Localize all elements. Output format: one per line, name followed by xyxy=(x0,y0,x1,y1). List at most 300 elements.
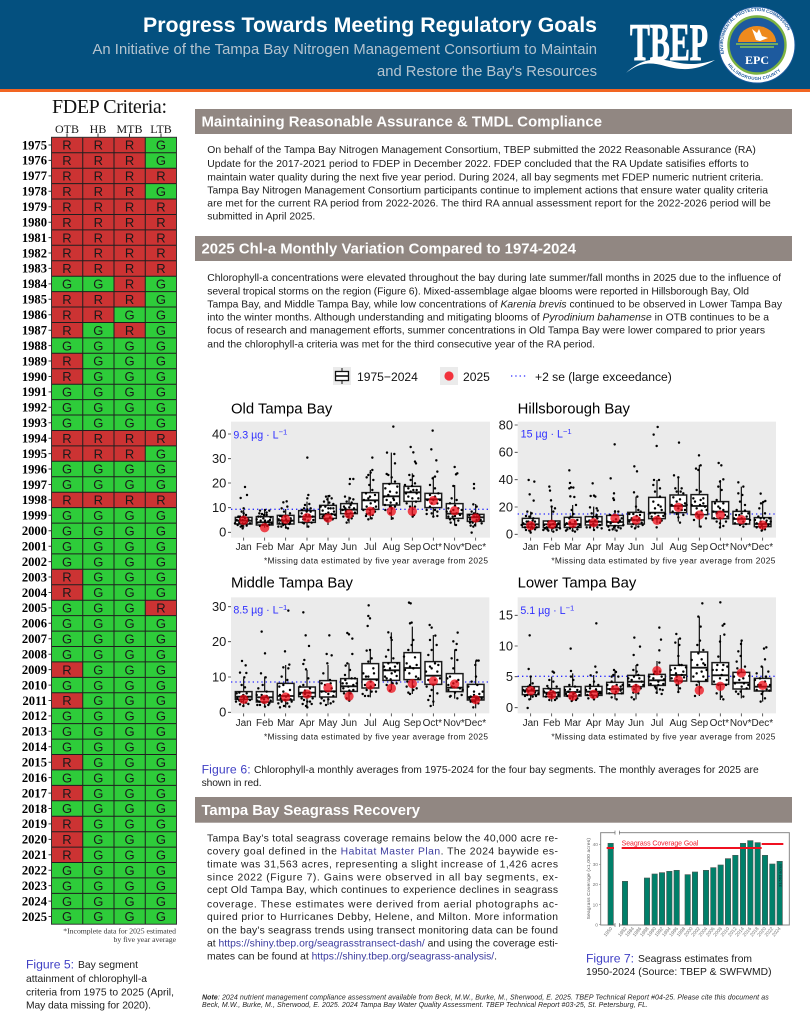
x axis labels: 2024 xyxy=(771,926,783,938)
month labels: May xyxy=(606,542,624,553)
month labels: Jul xyxy=(651,542,663,553)
x axis labels: 2000 xyxy=(683,926,695,938)
year labels: 1996 xyxy=(22,462,47,476)
x axis labels: 2008 xyxy=(712,926,724,938)
year labels: 2016 xyxy=(22,771,47,785)
heatmap cell letters: RGGG xyxy=(62,832,166,847)
month labels: Sep xyxy=(403,542,422,553)
heatmap cell letters: GGGG xyxy=(62,801,166,816)
y axis labels: 0 xyxy=(219,705,226,720)
month labels: Mar xyxy=(564,542,582,553)
heatmap cell letters xyxy=(62,138,166,924)
heatmap cell letters: GGGG xyxy=(62,863,166,878)
heatmap cell letters: RRRG xyxy=(62,184,166,199)
heatmap cell letters: RRRR xyxy=(62,431,166,446)
column labels xyxy=(55,122,172,136)
text block: Seagrass paragraph: cept Old Tampa Bay, which continues to experience declines in seagrass xyxy=(207,885,558,896)
panel: FDEP criteria heatmap xyxy=(22,96,177,1012)
y axis labels: 30 xyxy=(212,599,226,614)
x axis labels: 2022 xyxy=(764,926,775,938)
logo: EPC seal: ENVIRONMENTAL PROTECTION COMMISSION xyxy=(720,8,790,54)
logo: TBEP: TBEP xyxy=(630,14,708,72)
threshold label: 8.5 µg · L xyxy=(233,605,279,617)
year labels: 2011 xyxy=(22,694,47,708)
y axis labels: 0 xyxy=(219,525,226,540)
year labels: 1987 xyxy=(22,324,47,338)
text block: Reasonable Assurance paragraph: are met for the current RA period from 2022-2026. The third RA annual assessment report for the 2022-2026 period will be xyxy=(207,198,771,209)
chart legend: 1975−2024 xyxy=(357,370,418,384)
text block: Seagrass paragraph: coverage. These estimates were derived from aerial photographs ac- xyxy=(207,899,558,910)
2025 monthly means xyxy=(239,496,480,532)
x axis labels: 1984 xyxy=(624,926,636,938)
caption: Figure 5: attainment of chlorophyll-a xyxy=(26,974,147,985)
logo: TBEP xyxy=(626,14,715,73)
y axis labels: 20 xyxy=(212,634,226,649)
year labels: 2000 xyxy=(22,524,47,538)
heatmap cell letters: RRRR xyxy=(62,230,166,245)
heatmap cell letters: RRRR xyxy=(62,493,166,508)
chart: Hillsborough Bay xyxy=(499,401,776,566)
text block: Reasonable Assurance paragraph: maintain water quality during the next five year period. During 2024, all bay segments met FDEP numeric nutrient criteria. xyxy=(207,172,764,183)
month labels: Mar xyxy=(564,718,582,729)
month labels: Apr xyxy=(586,718,602,729)
heatmap cell letters: GGGG xyxy=(62,878,166,893)
y axis labels: 20 xyxy=(212,475,226,490)
text block: Chl-a paragraph: several tropical storms on the region (Figure 6). Mixed-assemblage algae blooms were reported in Hillsborough Bay, Old xyxy=(207,286,749,297)
y axis labels: 20 xyxy=(499,499,513,514)
year labels: 1983 xyxy=(22,262,47,276)
text block: Seagrass paragraph: covery goal defined in the Habitat Master Plan. The 2024 baywide es- xyxy=(207,846,558,857)
chart: Middle Tampa Bay xyxy=(212,576,489,741)
heatmap cell letters: GGGG xyxy=(62,709,166,724)
year labels: 1978 xyxy=(22,185,47,199)
caption: Figure 7: Seagrass estimates from xyxy=(638,954,752,965)
year labels: 2015 xyxy=(22,756,47,770)
month labels: Aug xyxy=(382,718,400,729)
header banner xyxy=(0,0,810,92)
heatmap cell letters: RRRR xyxy=(62,215,166,230)
heatmap footnote: by five year average xyxy=(113,935,177,944)
text block: Seagrass paragraph: mates can be found at https://shiny.tbep.org/seagrass-analysis/. xyxy=(207,951,497,962)
year labels: 2013 xyxy=(22,725,47,739)
year labels: 1992 xyxy=(22,401,47,415)
threshold label: 9.3 µg · L xyxy=(233,429,279,441)
heatmap cell letters: GGGG xyxy=(62,616,166,631)
y axis labels: 40 xyxy=(499,472,513,487)
y axis: 20 xyxy=(593,882,598,888)
y axis labels: 10 xyxy=(212,669,226,684)
year labels: 1991 xyxy=(22,385,47,399)
month labels xyxy=(523,542,773,553)
year labels: 2019 xyxy=(22,817,47,831)
text block: Seagrass paragraph: timate was 31,563 acres, representing a slight increase of 1,426 acres xyxy=(207,859,558,870)
year labels: 2014 xyxy=(22,740,48,754)
data points 1975-2024 xyxy=(236,603,483,707)
month labels: Nov* xyxy=(443,542,465,553)
month labels: May xyxy=(319,542,337,553)
x axis labels: 1998 xyxy=(676,926,687,938)
text block: Seagrass paragraph: since 2022 (Figure 7). Gains were observed in all bay segments, ex- xyxy=(207,872,558,883)
heatmap cell letters: RRRG xyxy=(62,138,166,153)
heatmap cell letters: RGGG xyxy=(62,786,166,801)
goal line xyxy=(607,844,783,848)
x axis labels: 1988 xyxy=(639,926,651,938)
month labels: Jun xyxy=(341,542,357,553)
column labels: LTB xyxy=(150,122,172,136)
year labels: 1976 xyxy=(22,154,47,168)
year labels: 2005 xyxy=(22,601,47,615)
year labels: 1979 xyxy=(22,200,47,214)
section heading: Seagrass Recovery xyxy=(195,797,792,823)
heatmap cell letters: RGGG xyxy=(62,585,166,600)
x axis labels: 2010 xyxy=(720,926,731,938)
year labels: 2017 xyxy=(22,786,47,800)
month labels: Dec* xyxy=(752,718,773,729)
year labels: 1994 xyxy=(22,432,48,446)
year labels: 2018 xyxy=(22,802,47,816)
section heading: Chl-a monthly variation: 2025 Chl-a Monthly Variation Compared to 1974-2024 xyxy=(202,241,577,257)
year labels: 2010 xyxy=(22,678,47,692)
heatmap footnote xyxy=(63,926,177,944)
chart: Old Tampa Bay xyxy=(212,401,490,566)
month labels: Jul xyxy=(651,718,663,729)
month labels: Feb xyxy=(543,718,561,729)
y axis labels xyxy=(499,608,513,715)
threshold label: −1 xyxy=(279,428,287,437)
heatmap cell letters: RGGG xyxy=(62,662,166,677)
x axis labels: 2012 xyxy=(727,926,739,938)
month labels: Sep xyxy=(403,718,422,729)
heatmap cell letters: GGGG xyxy=(62,909,166,924)
year labels: 2022 xyxy=(22,864,47,878)
heatmap cell letters: GGGG xyxy=(62,894,166,909)
month labels: Dec* xyxy=(465,542,486,553)
caption: Figure 6 xyxy=(202,762,759,789)
y axis labels: 15 xyxy=(499,608,513,623)
month labels: Nov* xyxy=(443,718,465,729)
column labels: HB xyxy=(90,122,106,136)
month labels: Aug xyxy=(669,718,687,729)
heatmap cell letters: RRRR xyxy=(62,246,166,261)
month labels: Jan xyxy=(236,718,252,729)
year labels: 1982 xyxy=(22,246,47,260)
month labels: Mar xyxy=(277,718,295,729)
heatmap cell letters: GGGG xyxy=(62,385,166,400)
month labels xyxy=(236,718,486,729)
month labels: Nov* xyxy=(730,718,752,729)
text block: Reasonable Assurance paragraph: Tampa Bay Nitrogen Management Consortium participants continue to implement actions that ensure water quality criteria xyxy=(207,185,768,196)
subtitle: An Initiative of the Tampa Bay Nitrogen Management Consortium to Maintain xyxy=(92,42,597,58)
caption: Figure 5: criteria from 1975 to 2025 (April, xyxy=(26,988,174,998)
year labels: 2023 xyxy=(22,879,47,893)
heatmap cell letters: GGGG xyxy=(62,554,166,569)
heatmap cell letters: GGGG xyxy=(62,740,166,754)
year labels: 1981 xyxy=(22,231,47,245)
month labels: Jul xyxy=(364,542,377,553)
month labels: Sep xyxy=(690,718,709,729)
section heading: Chl-a monthly variation xyxy=(195,236,792,261)
heatmap cell letters: GGGG xyxy=(62,462,166,477)
heatmap cell letters: GGGG xyxy=(62,338,166,353)
x axis labels: 2016 xyxy=(742,926,753,938)
chart legend: +2 se (large exceedance) xyxy=(535,370,672,384)
x axis labels: 2018 xyxy=(749,926,761,938)
heatmap cell letters: GGGG xyxy=(62,678,166,693)
heatmap cell letters: RGGG xyxy=(62,817,166,832)
2025 monthly means xyxy=(526,666,767,701)
month labels: Oct* xyxy=(710,542,729,553)
year labels: 2020 xyxy=(22,833,47,847)
chart note: *Missing data estimated by five year average from 2025 xyxy=(551,731,776,741)
logo: EPC seal: EPC xyxy=(745,53,769,67)
month labels: Feb xyxy=(543,542,561,553)
heatmap cell letters: GGGG xyxy=(62,524,166,538)
y axis labels: 5 xyxy=(506,669,513,684)
y axis labels: 10 xyxy=(499,638,513,653)
month labels xyxy=(523,718,773,729)
threshold label: 5.1 µg · L xyxy=(520,605,566,617)
heatmap cell letters: GGGG xyxy=(62,539,166,554)
year labels: 1997 xyxy=(22,478,47,492)
month labels: Jun xyxy=(628,542,644,553)
heatmap cell letters: GGGG xyxy=(62,770,166,785)
threshold line xyxy=(518,674,776,678)
year labels: 1975 xyxy=(22,138,47,152)
threshold label: 15 µg · L xyxy=(521,429,563,441)
x axis labels: 1982 xyxy=(617,926,629,938)
month labels: Dec* xyxy=(752,542,773,553)
month labels: Aug xyxy=(382,542,400,553)
chart note: *Missing data estimated by five year average from 2025 xyxy=(551,556,776,566)
text block: Chl-a paragraph: Chlorophyll-a concentrations were elevated throughout the bay during late summer/fall months in 2025 due to the influence of xyxy=(207,273,781,284)
y axis labels: 80 xyxy=(499,417,513,432)
x axis labels xyxy=(603,926,783,938)
x axis labels: 1994 xyxy=(661,926,673,938)
month labels: May xyxy=(606,718,624,729)
month labels: Jun xyxy=(341,718,357,729)
year labels: 1988 xyxy=(22,339,47,353)
title: Progress Towards Meeting Regulatory Goals xyxy=(143,13,597,37)
caption: Figure 6: Figure 6: xyxy=(202,762,251,776)
heatmap cells xyxy=(52,134,176,924)
text block: Reasonable Assurance paragraph xyxy=(207,145,771,222)
year labels: 2008 xyxy=(22,648,47,662)
heading: FDEP Criteria: FDEP Criteria: xyxy=(52,96,167,118)
2025 monthly means xyxy=(526,503,767,530)
heatmap cell letters: GGGG xyxy=(62,415,166,430)
y axis: 10 xyxy=(593,902,598,908)
year labels: 2006 xyxy=(22,617,47,631)
heatmap cell letters: RGGG xyxy=(62,369,166,384)
caption: Figure 5: Bay segment xyxy=(78,960,138,971)
x axis labels: 2006 xyxy=(705,926,717,938)
threshold label: −1 xyxy=(566,603,574,612)
caption: Figure 5: May data missing for 2020). xyxy=(26,1000,151,1012)
month labels: Dec* xyxy=(465,718,486,729)
heatmap cell letters: GGGG xyxy=(62,724,166,739)
month labels: May xyxy=(319,718,337,729)
chart note: *Missing data estimated by five year average from 2025 xyxy=(264,556,488,566)
x axis labels: 1996 xyxy=(668,926,680,938)
y axis labels: 0 xyxy=(506,700,513,715)
chart legend xyxy=(333,367,672,385)
section heading: Reasonable Assurance xyxy=(195,109,792,134)
text block: Chl-a paragraph: into the winter months. Although understanding and mitigating blooms of Pyrodinium bahamense in OTB continues to be a xyxy=(207,312,769,323)
y axis: 40 xyxy=(593,842,598,848)
chart title: Hillsborough Bay xyxy=(518,401,631,417)
column labels: OTB xyxy=(55,122,79,136)
text block: Chl-a paragraph: and the chlorophyll-a criteria was met for the third consecutive year of the RA period. xyxy=(207,339,595,350)
x axis labels: 1990 xyxy=(646,926,658,938)
month labels: Apr xyxy=(586,542,602,553)
x axis labels: 2002 xyxy=(690,926,702,938)
month labels: Feb xyxy=(256,542,274,553)
chart: seagrass coverage bars xyxy=(586,831,789,938)
y axis labels: 40 xyxy=(212,426,226,441)
year labels: 2009 xyxy=(22,663,47,677)
text block: Chl-a paragraph: focus of research and management efforts, summer concentrations in Old Tampa Bay were lower compared to prior years xyxy=(207,326,765,337)
text block: Reasonable Assurance paragraph: On behalf of the Tampa Bay Nitrogen Management Consortium, TBEP submitted the 2022 Reasonable Assurance (RA) xyxy=(207,145,756,156)
y axis labels xyxy=(212,426,226,540)
x axis labels: 1950 xyxy=(603,926,614,938)
year labels: 1986 xyxy=(22,308,47,322)
y axis labels: 30 xyxy=(212,451,226,466)
caption: Figure 7: 1950-2024 (Source: TBEP & SWFWMD) xyxy=(586,967,772,978)
y axis labels: 60 xyxy=(499,445,513,460)
heatmap cell letters: RGGG xyxy=(62,848,166,862)
heatmap cell letters: RRRR xyxy=(62,169,166,184)
month labels: Apr xyxy=(299,542,315,553)
data points 1975-2024 xyxy=(523,602,770,708)
year labels: 2007 xyxy=(22,632,47,646)
y axis: Seagrass Coverage (x1,000 acres) xyxy=(586,838,592,919)
chart title: Old Tampa Bay xyxy=(231,401,333,417)
heatmap cell letters: GGGG xyxy=(62,632,166,646)
heatmap cell letters: RRRG xyxy=(62,446,166,461)
bars xyxy=(608,841,782,925)
y axis labels: 10 xyxy=(212,500,226,515)
caption: Figure 5: Figure 5: xyxy=(26,958,74,972)
month labels: Jan xyxy=(523,718,539,729)
month labels: Feb xyxy=(256,718,274,729)
y axis xyxy=(586,838,601,928)
heatmap cell letters: RRGG xyxy=(62,307,166,322)
heatmap footnote: *Incomplete data for 2025 estimated xyxy=(63,926,176,936)
month labels: Oct* xyxy=(423,718,442,729)
column labels: MTB xyxy=(116,122,143,136)
x axis labels: 2014 xyxy=(734,926,746,938)
footnote: Beck, M.W., Burke, M., Sherwood, E. 2025. 2024 Tampa Bay Water Quality Assessment. TBEP Technical Report #03-25, St. Petersburg, FL. xyxy=(202,1002,648,1009)
year labels: 1993 xyxy=(22,416,47,430)
x axis labels: 1992 xyxy=(654,926,665,938)
text block: Seagrass paragraph: Tampa Bay's total seagrass coverage remains below the 40,000 acre re- xyxy=(207,833,558,844)
heatmap cell letters: RGGG xyxy=(62,354,166,369)
month labels: Sep xyxy=(690,542,709,553)
threshold label: −1 xyxy=(279,603,287,612)
x axis labels: 1986 xyxy=(632,926,643,938)
heatmap cell letters: RGRG xyxy=(62,323,166,338)
logo: EPC seal xyxy=(718,6,796,84)
text block: Chl-a paragraph xyxy=(207,273,783,350)
year labels: 1990 xyxy=(22,370,47,384)
month labels: Aug xyxy=(669,542,687,553)
year labels: 2025 xyxy=(22,910,47,924)
year labels: 1998 xyxy=(22,493,47,507)
heatmap cell letters: RRRG xyxy=(62,292,166,307)
subtitle: and Restore the Bay's Resources xyxy=(377,64,597,80)
text block: Seagrass paragraph: quired prior to Hurricanes Debby, Helene, and Milton. More information xyxy=(207,912,558,923)
text block: Seagrass paragraph: on the bay's seagrass trends using transect monitoring data can be found xyxy=(207,925,558,936)
month labels: Oct* xyxy=(423,542,442,553)
text block: Reasonable Assurance paragraph: submitted in April 2025. xyxy=(207,211,315,222)
heatmap cell letters: GGGG xyxy=(62,400,166,415)
heatmap cell letters: GGGG xyxy=(62,647,166,662)
chart title: Middle Tampa Bay xyxy=(231,576,354,592)
heatmap cell letters: RRRR xyxy=(62,199,166,214)
y axis labels xyxy=(499,417,513,542)
text block: Reasonable Assurance paragraph: Update for the 2017-2021 period to FDEP in December 2022. FDEP concluded that the RA Update satisifies efforts to xyxy=(207,159,749,170)
year labels: 1977 xyxy=(22,169,47,183)
year labels: 1984 xyxy=(22,277,48,291)
y axis labels xyxy=(212,599,226,720)
year labels xyxy=(22,138,52,924)
y axis: 30 xyxy=(593,862,598,868)
month labels: Jun xyxy=(628,718,644,729)
year labels: 2002 xyxy=(22,555,47,569)
logo: EPC seal: HILLSBOROUGH COUNTY xyxy=(728,63,780,80)
caption: Figure 5 xyxy=(26,958,174,1012)
heatmap cell letters: RGGG xyxy=(62,570,166,585)
threshold label: −1 xyxy=(563,427,572,436)
section heading: Seagrass Recovery: Tampa Bay Seagrass Recovery xyxy=(202,803,421,819)
year labels: 2021 xyxy=(22,848,47,862)
threshold line xyxy=(231,507,490,511)
section heading: Reasonable Assurance: Maintaining Reasonable Assurance & TMDL Compliance xyxy=(202,114,602,130)
month labels: Jul xyxy=(364,718,377,729)
footnote xyxy=(202,994,769,1009)
month labels: Oct* xyxy=(710,718,729,729)
heatmap cell letters: GGGG xyxy=(62,477,166,492)
heatmap cell letters: RRRG xyxy=(62,153,166,168)
text block: Chl-a paragraph: Tampa Bay, and Middle Tampa Bay, while low concentrations of Karenia brevis continued to be observed in Lower Tampa Bay xyxy=(207,299,783,310)
x axis labels: 2004 xyxy=(698,926,709,938)
heatmap cell letters: GGGG xyxy=(62,508,166,523)
bar value label: 31,563 acres xyxy=(777,864,782,887)
heatmap cell letters: GGGR xyxy=(62,601,166,616)
chart title: Lower Tampa Bay xyxy=(518,576,637,592)
year labels: 1989 xyxy=(22,354,47,368)
text block: Seagrass paragraph: at https://shiny.tbep.org/seagrasstransect-dash/ and using the coverage esti- xyxy=(207,938,558,949)
chart note: *Missing data estimated by five year average from 2025 xyxy=(264,731,488,741)
caption: Figure 6: Chlorophyll-a monthly averages from 1975-2024 for the four bay segments. The monthly averages for 2025 are xyxy=(254,765,759,776)
caption: Figure 7: Figure 7: xyxy=(586,952,634,966)
year labels: 1999 xyxy=(22,509,47,523)
chart legend: 2025 xyxy=(463,370,490,384)
month labels: Jan xyxy=(523,542,539,553)
y axis: 0 xyxy=(595,922,598,928)
caption: Figure 7 xyxy=(586,952,772,978)
month labels xyxy=(236,542,486,553)
footnote: Note: 2024 nutrient management compliance assessment available from Beck, M.W., Burke, M., Sherwood, E. 2025. TBEP Technical Report #04-25. Please cite this document as xyxy=(202,994,769,1001)
year labels: 2003 xyxy=(22,570,47,584)
threshold line xyxy=(231,680,489,684)
subtitle xyxy=(92,42,597,80)
year labels: 1985 xyxy=(22,293,47,307)
month labels: Apr xyxy=(299,718,315,729)
threshold line xyxy=(518,512,776,516)
year labels: 1995 xyxy=(22,447,47,461)
year labels: 1980 xyxy=(22,216,47,230)
